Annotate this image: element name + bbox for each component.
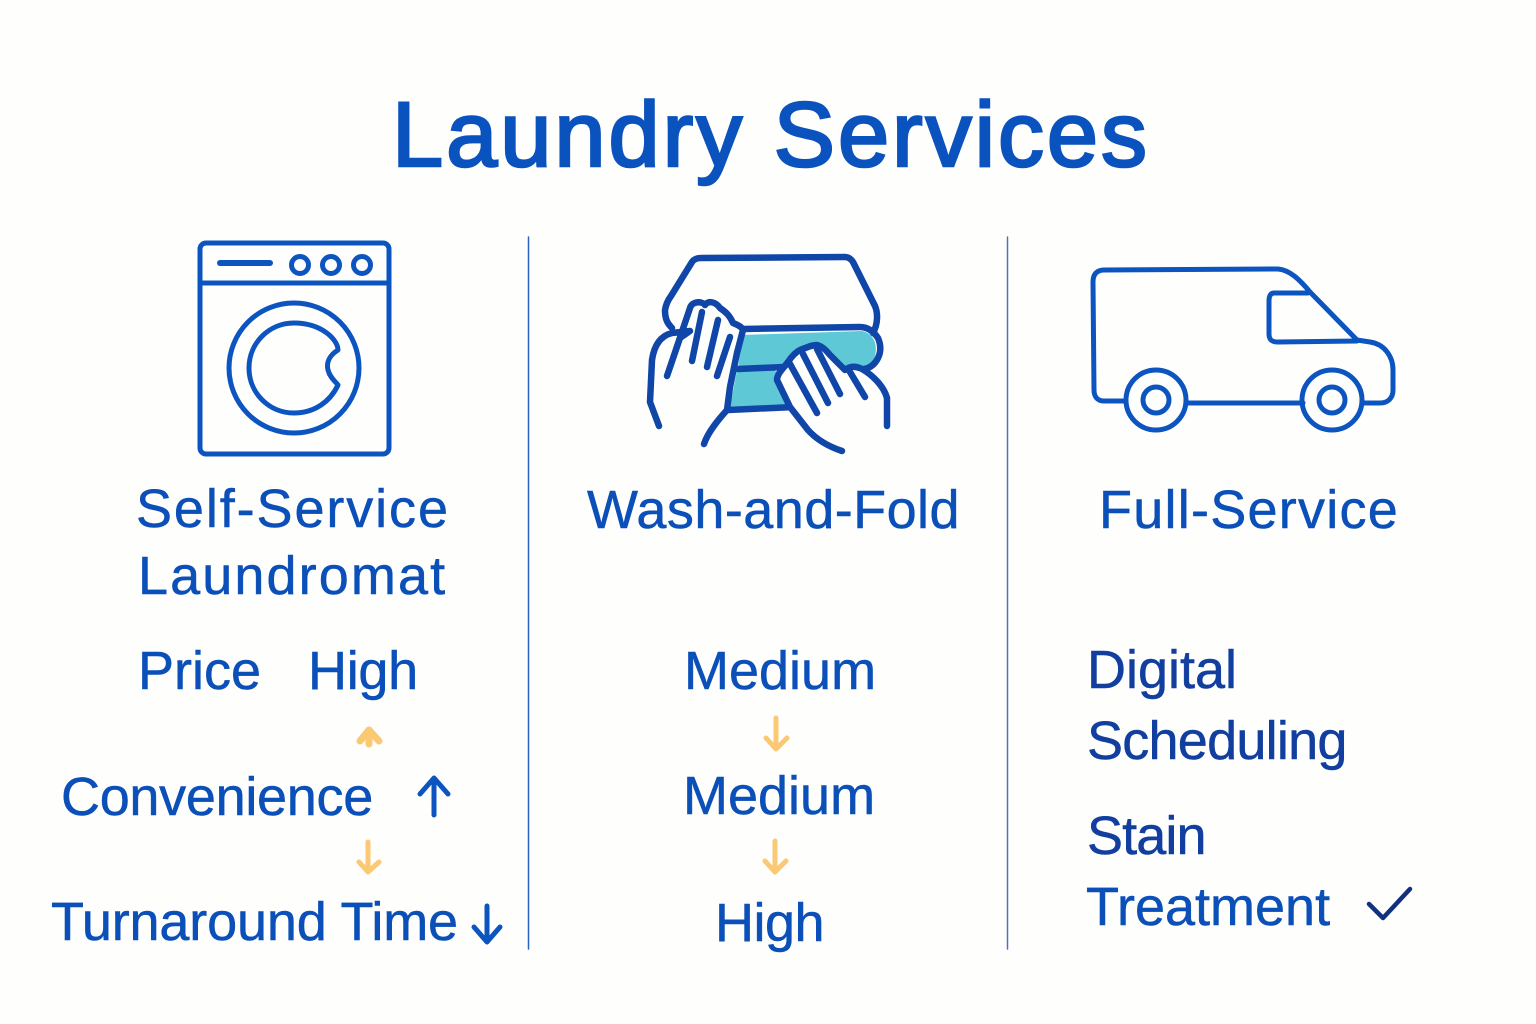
label: turnaround time: Turnaround Time	[51, 892, 458, 952]
heading: wash-and-fold: Wash-and-Fold	[587, 480, 960, 540]
value: high turnaround: High	[715, 893, 824, 953]
icon: washing machine	[200, 243, 389, 454]
feature: treatment: Treatment	[1086, 877, 1330, 937]
feature: scheduling: Scheduling	[1087, 711, 1347, 771]
label: convenience: Convenience	[61, 767, 373, 827]
value: medium price: Medium	[684, 641, 876, 701]
icon: down arrow yellow left	[359, 842, 379, 872]
value: medium convenience: Medium	[683, 766, 875, 826]
title: Laundry Services	[392, 84, 1150, 186]
heading: self-service: Self-Service	[136, 479, 450, 539]
icon: up arrow convenience	[420, 778, 448, 815]
icon: delivery van	[1093, 269, 1393, 430]
feature: stain: Stain	[1087, 806, 1206, 866]
icon: down arrow yellow middle top	[766, 718, 787, 749]
icon: check mark	[1369, 889, 1410, 918]
feature: digital: Digital	[1087, 640, 1237, 700]
heading: laundromat: Laundromat	[138, 546, 447, 606]
icon: up arrow price	[360, 730, 379, 744]
heading: full-service: Full-Service	[1099, 480, 1399, 540]
label: price: Price	[138, 641, 261, 701]
value: price high: High	[308, 641, 418, 701]
icon: folded laundry and hands	[650, 257, 887, 451]
icon: down arrow yellow middle bottom	[765, 841, 786, 872]
icon: down arrow turnaround	[474, 906, 500, 942]
